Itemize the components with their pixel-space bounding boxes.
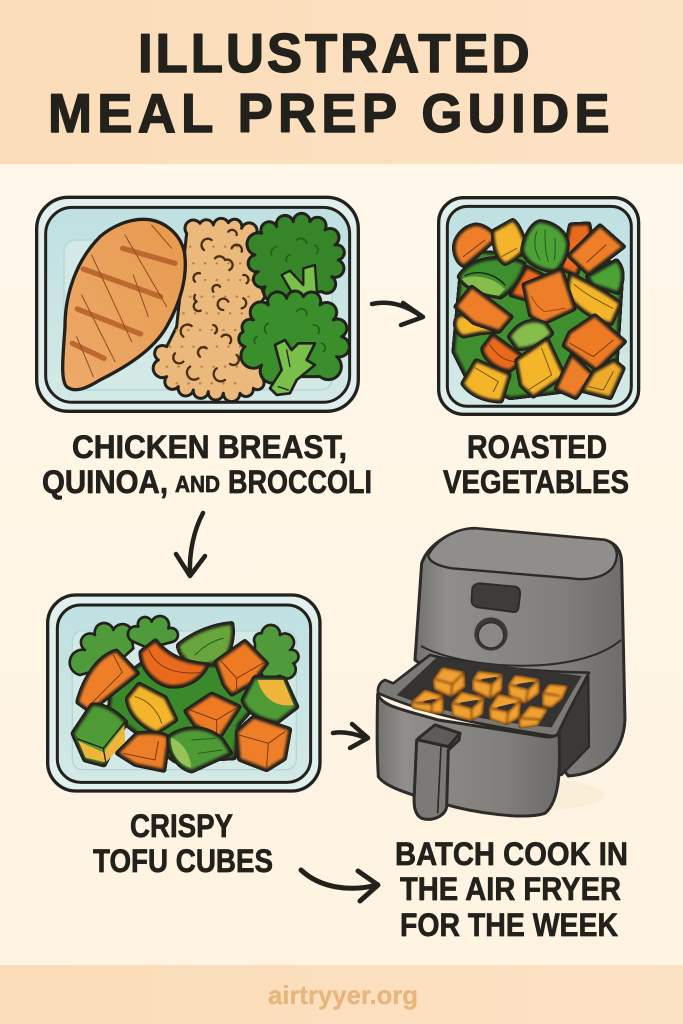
title: ILLUSTRATED: [138, 23, 530, 84]
label: chicken breast, quinoa and broccoli: QUINOA,: [42, 464, 168, 500]
vegetable pile: [453, 220, 625, 402]
chicken breast: [63, 219, 185, 390]
drawer cavity: [555, 677, 589, 775]
air fryer: [377, 528, 625, 819]
quinoa: [153, 218, 270, 402]
drawer handle: [414, 725, 460, 819]
label: roasted vegetables: VEGETABLES: [443, 464, 629, 500]
fryer lid: [428, 528, 617, 579]
tofu cubes in basket: [411, 668, 568, 728]
label: batch cook in the air fryer for the week: BATCH COOK IN: [395, 836, 628, 872]
title: [48, 23, 610, 144]
label: roasted vegetables: [443, 429, 629, 500]
label: batch cook in the air fryer for the week: THE AIR FRYER: [400, 871, 621, 907]
footer band: [0, 965, 683, 1024]
website credit: airtryyer.org: [268, 980, 418, 1010]
label: chicken breast, quinoa and broccoli: CHICKEN BREAST,: [72, 429, 347, 465]
label: chicken breast, quinoa and broccoli: [42, 429, 372, 500]
basket: [377, 655, 589, 816]
title: MEAL PREP GUIDE: [48, 83, 610, 144]
panel: chicken, quinoa and broccoli container: [37, 197, 358, 411]
label: crispy tofu cubes: CRISPY: [130, 808, 233, 844]
broccoli bottom: [239, 291, 349, 395]
label: chicken breast, quinoa and broccoli: AND: [175, 471, 220, 497]
knob: [474, 617, 508, 651]
arrow: chicken label to tofu tray: [176, 513, 205, 576]
label: roasted vegetables: ROASTED: [467, 429, 607, 465]
label: chicken breast, quinoa and broccoli: BROCCOLI: [228, 464, 372, 500]
arrow: tofu tray to air fryer: [333, 724, 368, 748]
label: crispy tofu cubes: TOFU CUBES: [93, 843, 273, 879]
tofu and vegetables: [70, 616, 299, 772]
label: crispy tofu cubes: [93, 808, 273, 879]
label: batch cook in the air fryer for the week: [395, 836, 628, 943]
fryer lower body seam: [421, 640, 621, 666]
panel: roasted vegetables container: [439, 198, 639, 414]
header band: [0, 0, 683, 164]
display: [472, 583, 520, 612]
fryer body: [415, 528, 625, 776]
broccoli top: [247, 213, 344, 302]
panel: crispy tofu cubes container: [48, 595, 320, 791]
arrow: chicken tray to vegetables: [372, 303, 423, 325]
label: batch cook in the air fryer for the week: FOR THE WEEK: [400, 907, 618, 943]
arrow: tofu label to batch cook label: [301, 870, 378, 901]
shadow: [405, 777, 605, 813]
